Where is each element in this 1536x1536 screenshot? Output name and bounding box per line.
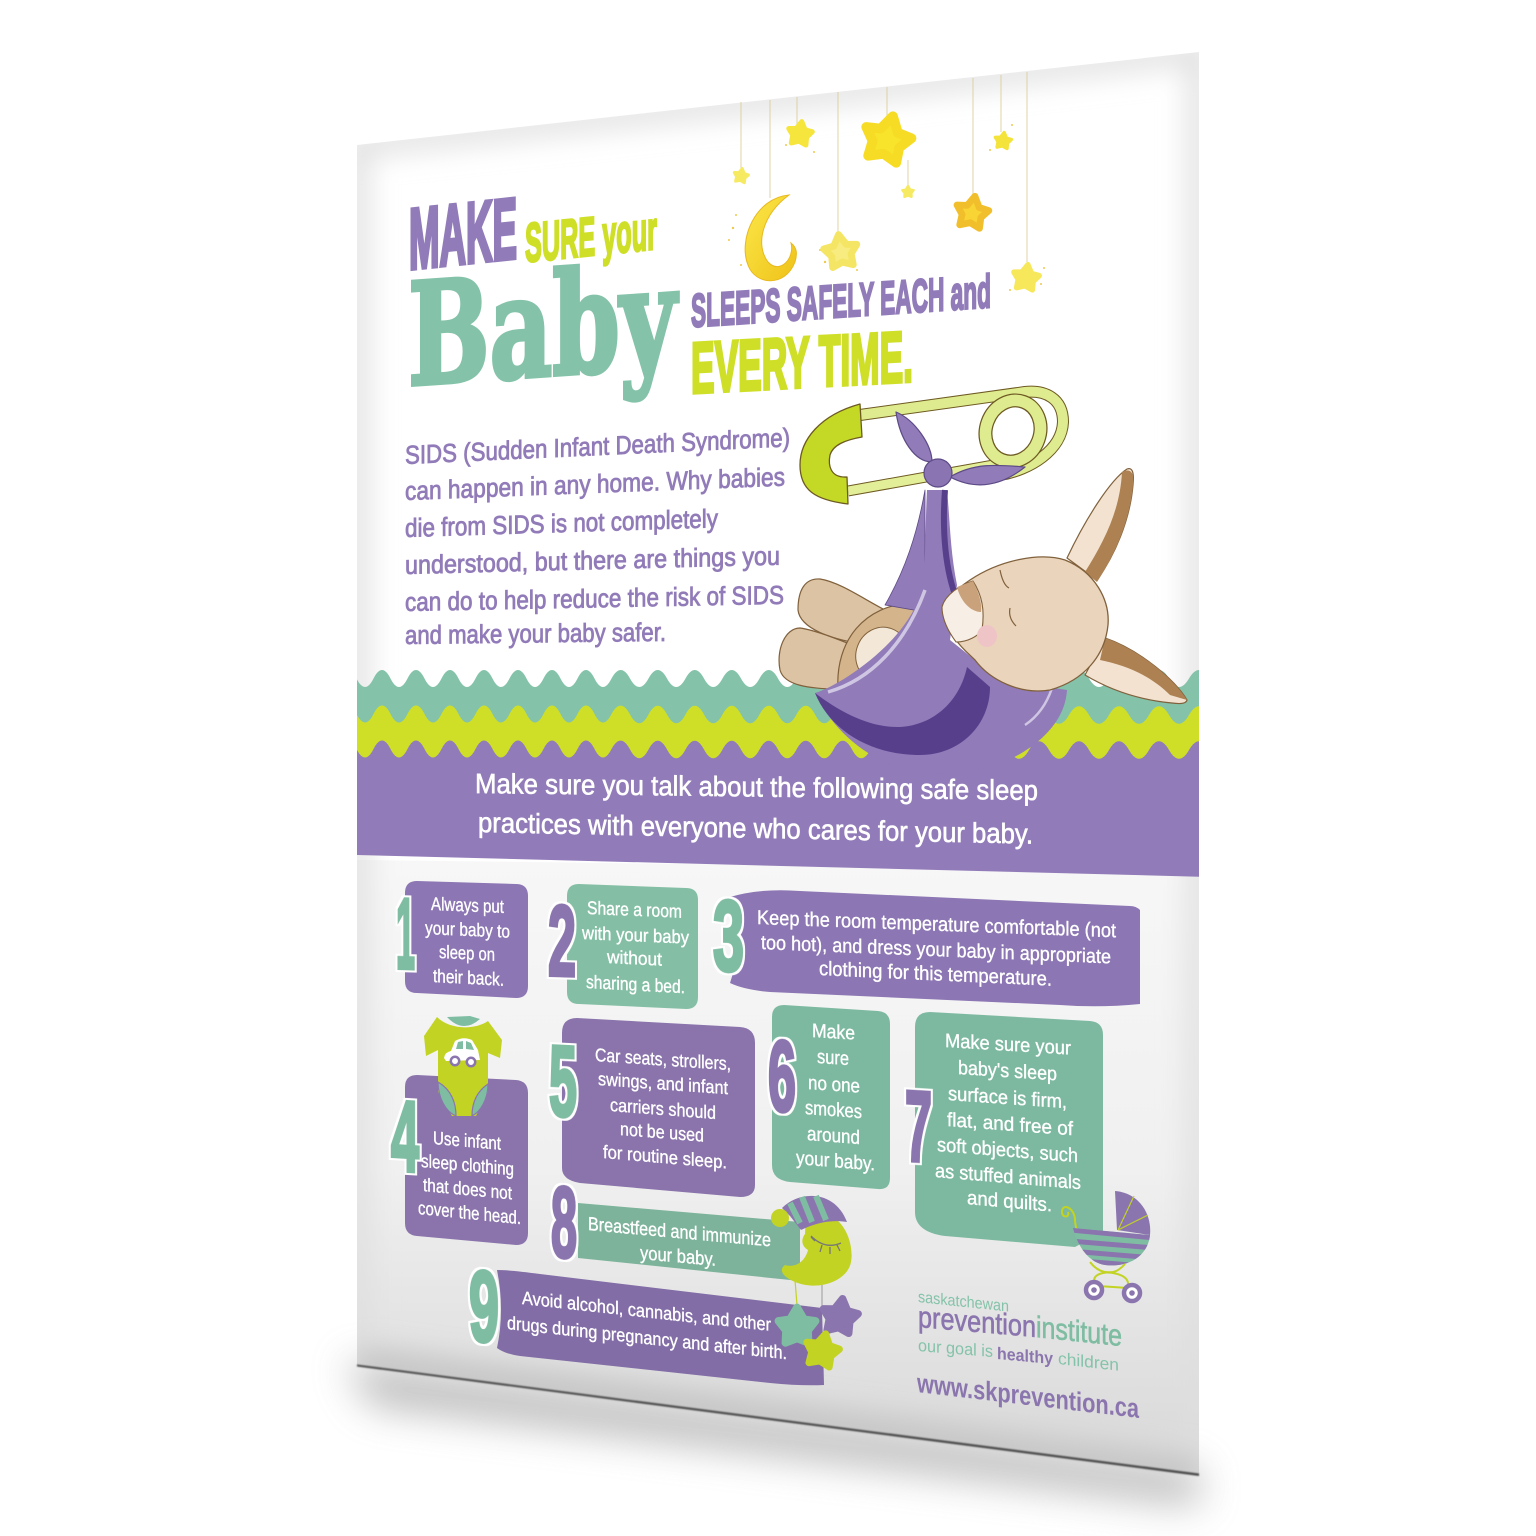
intro paragraph — [405, 422, 790, 650]
logo: Saskatchewan Prevention Institute: healthy — [997, 1344, 1053, 1368]
step 9: Avoid alcohol, cannabis, and other — [522, 1287, 771, 1335]
step 6: smokes — [805, 1097, 862, 1123]
step 9 — [469, 1250, 824, 1385]
step 1: their back. — [433, 965, 504, 990]
step 5: Car seats, strollers, — [595, 1044, 731, 1074]
icon: crescent moon — [745, 195, 796, 281]
step 6: your baby. — [796, 1147, 875, 1176]
step 6: no one — [808, 1072, 860, 1098]
icon: orange star — [954, 193, 991, 229]
step 8: Breastfeed and immunize — [588, 1214, 771, 1251]
step 5: for routine sleep. — [603, 1141, 727, 1173]
step 5: swings, and infant — [598, 1068, 729, 1098]
panel 1 — [405, 881, 528, 998]
step 7: surface is firm, — [948, 1083, 1067, 1113]
bunny head — [943, 557, 1108, 691]
step 7: 7 — [905, 1070, 932, 1184]
swaddle cloth — [885, 490, 925, 612]
step 9: drugs during pregnancy and after birth. — [507, 1312, 787, 1363]
step 7: flat, and free of — [947, 1109, 1074, 1140]
intro paragraph: can do to help reduce the risk of SIDS — [405, 580, 784, 617]
website url: www.skprevention.ca — [916, 1367, 1140, 1424]
knot and flaps — [896, 412, 932, 462]
step 1 — [396, 878, 528, 998]
number 5: 5 — [549, 1025, 577, 1138]
logo: Saskatchewan Prevention Institute: children — [1058, 1349, 1119, 1375]
step 1: sleep on — [439, 941, 495, 965]
step 5: not be used — [620, 1118, 704, 1146]
step 6: sure — [817, 1046, 849, 1070]
hanging stars and moon — [728, 72, 1045, 291]
logo: Saskatchewan Prevention Institute: institute — [1036, 1311, 1122, 1353]
icon: baby onesie — [424, 1016, 502, 1116]
lime wave — [357, 706, 1199, 759]
logo: Saskatchewan Prevention Institute — [918, 1288, 1122, 1375]
panel 8 — [578, 1203, 800, 1281]
step 8: your baby. — [640, 1243, 716, 1271]
panel 6 — [772, 1005, 890, 1189]
step 1: your baby to — [425, 917, 510, 942]
step 6: Make — [812, 1020, 855, 1045]
safety pin — [800, 392, 1063, 504]
icon: sleeping moon with nightcap and stars — [771, 1196, 860, 1368]
icon: tiny star — [902, 186, 914, 197]
intro paragraph: can happen in any home. Why babies — [405, 462, 785, 506]
number 2: 2 — [548, 885, 576, 998]
step 4: Use infant — [433, 1127, 502, 1154]
logo: Saskatchewan Prevention Institute: our goal is — [918, 1336, 993, 1361]
icon: small star right — [994, 131, 1012, 149]
icon: star — [787, 120, 813, 146]
intro paragraph: understood, but there are things you — [405, 541, 780, 580]
step 7: and quilts. — [967, 1187, 1052, 1216]
step 4: cover the head. — [418, 1197, 521, 1228]
logo: Saskatchewan Prevention Institute: prevention — [918, 1301, 1036, 1344]
title: MAKE — [409, 181, 517, 288]
step 5 — [549, 1018, 755, 1197]
panel 7 — [915, 1012, 1103, 1247]
step 5: carriers should — [610, 1094, 716, 1123]
step 6 — [768, 1005, 890, 1189]
step 7 — [905, 1012, 1103, 1247]
step 3: Keep the room temperature comfortable (not — [757, 907, 1116, 942]
panel 9 — [497, 1270, 824, 1385]
logo: Saskatchewan Prevention Institute: saskatchewan — [918, 1288, 1009, 1316]
step 1: Always put — [431, 893, 504, 917]
step 2: with your baby — [581, 922, 690, 948]
step 3: too hot), and dress your baby in appropriate — [761, 932, 1111, 968]
step 3: clothing for this temperature. — [819, 958, 1052, 991]
banner message: Make sure you talk about the following safe sleep — [475, 768, 1038, 806]
step 2: Share a room — [587, 897, 682, 922]
number 3: 3 — [713, 880, 744, 993]
title: Baby: Baby — [408, 234, 679, 419]
intro paragraph: SIDS (Sudden Infant Death Syndrome) — [405, 422, 790, 470]
step 4 — [391, 1016, 528, 1245]
step 7: soft objects, such — [937, 1134, 1078, 1167]
icon: small star — [733, 167, 749, 183]
title — [408, 181, 991, 419]
step 2 — [548, 884, 698, 1009]
step 7: baby's sleep — [958, 1057, 1057, 1085]
text: SLEEPS SAFELY EACH and — [691, 264, 991, 337]
step 8: 8 — [551, 1166, 577, 1280]
sheet background — [357, 52, 1199, 1475]
panel 3 — [730, 890, 1140, 1006]
title: EVERY TIME. — [691, 317, 913, 409]
number 4: 4 — [391, 1080, 419, 1194]
icon: baby carriage — [1062, 1191, 1155, 1301]
intro paragraph: die from SIDS is not completely — [405, 503, 718, 543]
banner message — [475, 768, 1038, 850]
step 3 — [713, 880, 1140, 1006]
step 2: without — [606, 946, 662, 970]
bunny ears — [1067, 469, 1133, 580]
step 4: sleep clothing — [421, 1150, 514, 1179]
step 6: around — [807, 1123, 860, 1149]
bunny feet — [798, 579, 885, 645]
number 9: 9 — [469, 1250, 499, 1364]
intro paragraph: and make your baby safer. — [405, 617, 666, 650]
panel 2 — [567, 884, 698, 1009]
step 2: sharing a bed. — [586, 971, 685, 997]
number 6: 6 — [768, 1020, 796, 1133]
teal wave — [357, 670, 1199, 724]
step 1: 1 — [396, 878, 415, 991]
panel 4 — [405, 1075, 528, 1245]
step 8 — [551, 1166, 800, 1281]
purple wave band — [356, 740, 1210, 877]
step 4: that does not — [423, 1174, 513, 1204]
flyer sheet — [356, 52, 1210, 1475]
icon: right pale star — [1012, 263, 1041, 291]
sparkle dots — [728, 124, 1045, 291]
icon: big star — [860, 111, 916, 165]
sheet bottom edge — [357, 1364, 1199, 1476]
banner message: practices with everyone who cares for your baby. — [478, 807, 1033, 850]
title: SURE your — [525, 199, 657, 274]
panel 5 — [562, 1018, 755, 1197]
drop shadow — [345, 1362, 1199, 1505]
icon: pale star — [822, 232, 859, 268]
step 7: as stuffed animals — [935, 1160, 1081, 1194]
illustration: bunny in bundle on safety pin — [779, 392, 1187, 774]
step 7: Make sure your — [945, 1030, 1071, 1060]
